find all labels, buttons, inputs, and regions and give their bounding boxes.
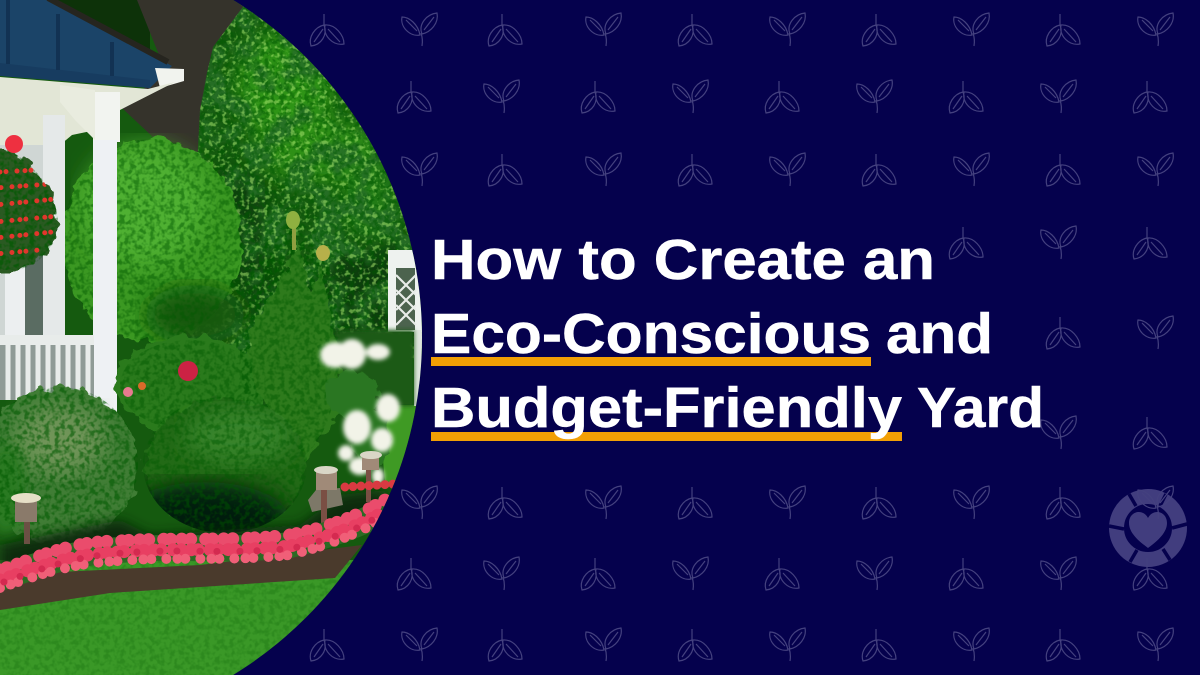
mulch bed xyxy=(0,545,362,610)
young slender tree xyxy=(240,211,340,460)
dark round boxwood bush xyxy=(142,396,307,533)
photo: garden with porch, clipped in a circle xyxy=(0,0,430,675)
porch roof xyxy=(0,0,184,145)
hydrangea leaves xyxy=(326,371,390,470)
backdrop: tree foliage xyxy=(0,0,430,560)
porch columns xyxy=(5,85,120,420)
solar path lights xyxy=(11,451,382,544)
dark ground shadow under shrubs xyxy=(0,490,385,575)
porch interior shadow xyxy=(0,145,43,335)
title: and xyxy=(886,302,993,366)
round topiary bush xyxy=(60,135,250,345)
tree trunk xyxy=(122,0,243,152)
pink flower border xyxy=(0,484,395,588)
title: Eco-Conscious xyxy=(431,302,871,366)
title xyxy=(431,228,1044,440)
low hedge behind the fence xyxy=(335,330,414,406)
title: Yard xyxy=(917,376,1044,440)
title: Budget-Friendly xyxy=(431,376,902,440)
white hydrangeas xyxy=(320,339,400,484)
mid foliage behind round bush xyxy=(115,335,265,435)
title underlines xyxy=(431,357,902,441)
porch railing xyxy=(0,335,94,400)
title: How to Create an xyxy=(431,228,935,292)
logo watermark: heart in ring xyxy=(1109,486,1187,590)
lawn xyxy=(0,405,425,675)
white lattice fence xyxy=(388,250,422,406)
variegated shrub left xyxy=(0,385,140,545)
background leaf pattern xyxy=(310,13,1173,661)
hanging flower basket xyxy=(0,135,65,275)
